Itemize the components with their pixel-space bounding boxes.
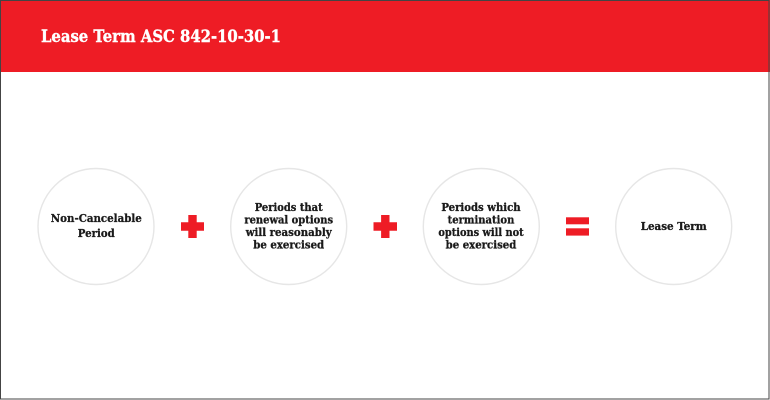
icon: equals (566, 217, 589, 236)
title: Lease Term ASC 842-10-30-1 (41, 27, 281, 47)
circle: renewal periods: be exercised (253, 238, 324, 252)
circle: termination periods: options will not (438, 225, 524, 239)
circle: termination periods (423, 168, 539, 284)
circle: renewal periods: will reasonably (245, 225, 332, 239)
circle: non-cancelable period: Non-Cancelable (51, 211, 142, 225)
circle: renewal periods (231, 168, 347, 284)
header band (0, 0, 770, 72)
circle: termination periods: be exercised (446, 238, 516, 252)
icon: plus (374, 215, 397, 238)
circle: termination periods: termination (448, 212, 515, 226)
icon: plus (181, 215, 204, 238)
circle: termination periods: Periods which (441, 200, 521, 214)
circle: non-cancelable period: Period (78, 226, 115, 240)
circle: renewal periods: Periods that (255, 200, 323, 214)
circle: lease term (616, 168, 732, 284)
circle: non-cancelable period (38, 168, 154, 284)
circle: renewal periods: renewal options (244, 212, 333, 226)
circle: lease term: Lease Term (641, 219, 707, 233)
